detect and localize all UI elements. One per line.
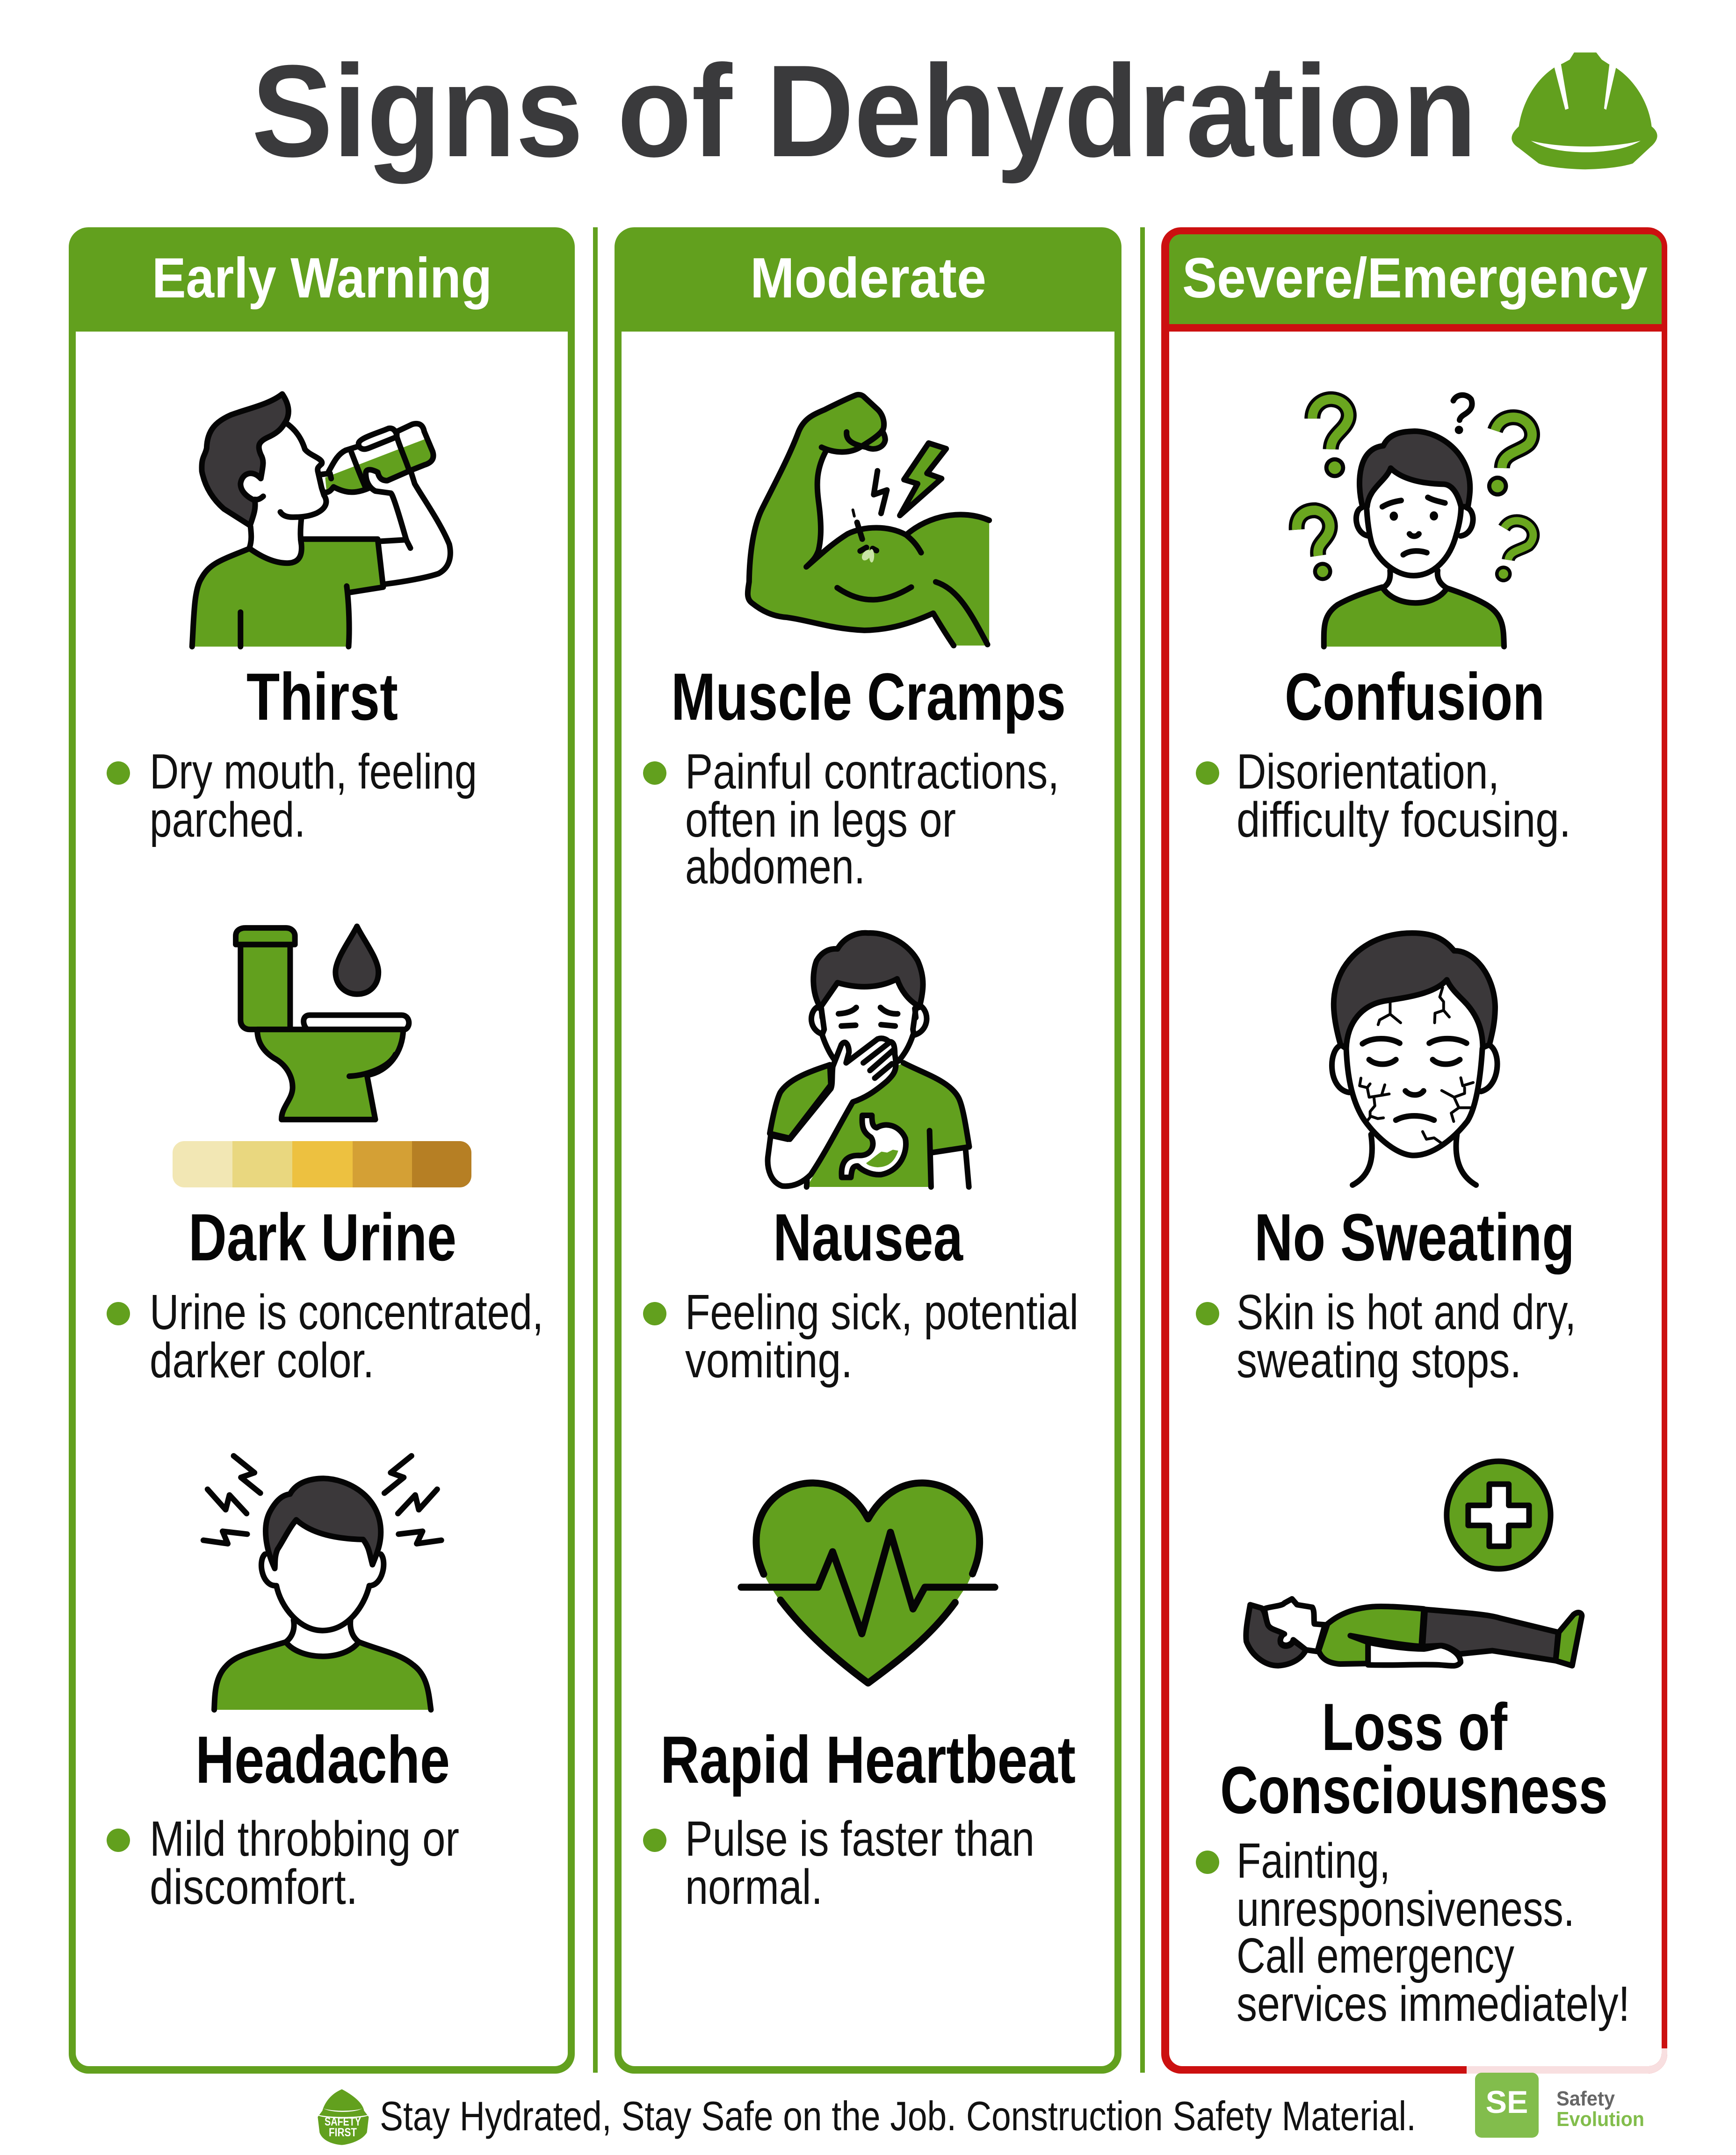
title: Signs of Dehydration — [252, 38, 1477, 185]
bullet — [1196, 761, 1219, 785]
icon: head with pain bolts — [203, 1456, 441, 1710]
footer: safety first helmet badge — [318, 2089, 369, 2145]
description: discomfort. — [150, 1859, 358, 1915]
panel frame and header — [69, 227, 575, 2074]
description — [150, 744, 477, 847]
item title: Dark Urine — [188, 1200, 456, 1275]
description: abdomen. — [685, 839, 865, 894]
item title: Consciousness — [1220, 1753, 1608, 1828]
description — [685, 1285, 1078, 1388]
item title: Confusion — [1285, 660, 1545, 734]
item: headache — [107, 1456, 459, 1915]
icon: face with cracked dry skin — [1332, 933, 1497, 1185]
description: often in legs or — [685, 792, 956, 847]
logo word: safety: Safety — [1556, 2087, 1615, 2110]
item: rapid heartbeat — [643, 1483, 1076, 1915]
item: confusion — [1196, 395, 1571, 847]
item title: Headache — [195, 1723, 450, 1797]
panel frame and header — [1161, 227, 1667, 2074]
panel: severe emergency — [1161, 227, 1667, 2074]
heading: severe emergency: Severe/Emergency — [1182, 246, 1648, 310]
item: nausea — [643, 933, 1078, 1388]
icon: nauseous person holding mouth — [768, 933, 969, 1187]
description: services immediately! — [1237, 1976, 1630, 2032]
description: vomiting. — [685, 1333, 853, 1388]
item: thirst — [107, 394, 477, 847]
bullet — [643, 1829, 666, 1852]
description: sweating stops. — [1237, 1333, 1521, 1388]
icon: heart with pulse line — [741, 1483, 995, 1683]
item title: Rapid Heartbeat — [660, 1723, 1076, 1797]
description — [1237, 1285, 1576, 1388]
description: difficulty focusing. — [1237, 792, 1571, 847]
item title: Muscle Cramps — [671, 660, 1066, 734]
item title: Thirst — [246, 660, 398, 734]
icon: person drinking from bottle — [192, 394, 450, 647]
description: unresponsiveness. — [1237, 1881, 1575, 1937]
description: Call emergency — [1237, 1928, 1514, 1983]
item title: No Sweating — [1254, 1200, 1575, 1275]
icon: toilet with dark drop — [236, 926, 409, 1120]
icon: person lying down with medical cross — [1246, 1461, 1582, 1666]
logo tile — [1475, 2073, 1539, 2138]
description — [1237, 744, 1571, 847]
item title: Nausea — [773, 1200, 963, 1275]
icon: confused person with question marks — [1297, 395, 1533, 647]
icon: small helmet — [318, 2089, 369, 2145]
description: parched. — [150, 792, 305, 847]
badge label: SAFETY — [325, 2115, 361, 2128]
divider 1 — [593, 227, 598, 2073]
description — [1237, 1833, 1630, 2032]
heading: moderate: Moderate — [750, 246, 986, 310]
logo initials: SE — [1486, 2084, 1528, 2120]
heading: early warning: Early Warning — [152, 246, 492, 310]
bullet — [107, 761, 130, 785]
description: Skin is hot and dry, — [1237, 1285, 1576, 1340]
footer logo: safety evolution — [1475, 2073, 1644, 2138]
description: Painful contractions, — [685, 744, 1059, 799]
description: Dry mouth, feeling — [150, 744, 477, 799]
item title: Loss of — [1322, 1690, 1507, 1764]
panel frame and header — [615, 227, 1121, 2074]
description: Feeling sick, potential — [685, 1285, 1078, 1340]
item: loss of consciousness — [1196, 1461, 1630, 2032]
urine colour scale — [173, 1141, 471, 1187]
bullet — [1196, 1851, 1219, 1874]
description — [685, 744, 1059, 894]
description: Mild throbbing or — [150, 1811, 459, 1866]
badge label second line: FIRST — [329, 2126, 357, 2139]
description — [150, 1285, 543, 1388]
panel: moderate — [615, 227, 1121, 2074]
panel: early warning — [69, 227, 575, 2074]
description: Fainting, — [1237, 1833, 1390, 1888]
description: Pulse is faster than — [685, 1811, 1034, 1866]
item: muscle cramps — [643, 395, 1066, 894]
bullet — [1196, 1302, 1219, 1325]
description: Disorientation, — [1237, 744, 1499, 799]
icon: flexed arm with lightning — [748, 395, 989, 645]
footer tagline: Stay Hydrated, Stay Safe on the Job. Construction Safety Material. — [380, 2093, 1416, 2139]
bullet — [643, 761, 666, 785]
icon: hard hat — [1512, 52, 1657, 169]
item: no sweating — [1196, 933, 1576, 1388]
description — [685, 1811, 1034, 1915]
description — [150, 1811, 459, 1915]
divider 2 — [1140, 227, 1145, 2073]
item: dark urine — [107, 926, 543, 1388]
logo word: evolution: Evolution — [1556, 2108, 1644, 2131]
bullet — [643, 1302, 666, 1325]
item title — [1220, 1690, 1608, 1828]
description: darker color. — [150, 1333, 374, 1388]
bullet — [107, 1302, 130, 1325]
bullet — [107, 1829, 130, 1852]
description: normal. — [685, 1859, 823, 1915]
description: Urine is concentrated, — [150, 1285, 543, 1340]
